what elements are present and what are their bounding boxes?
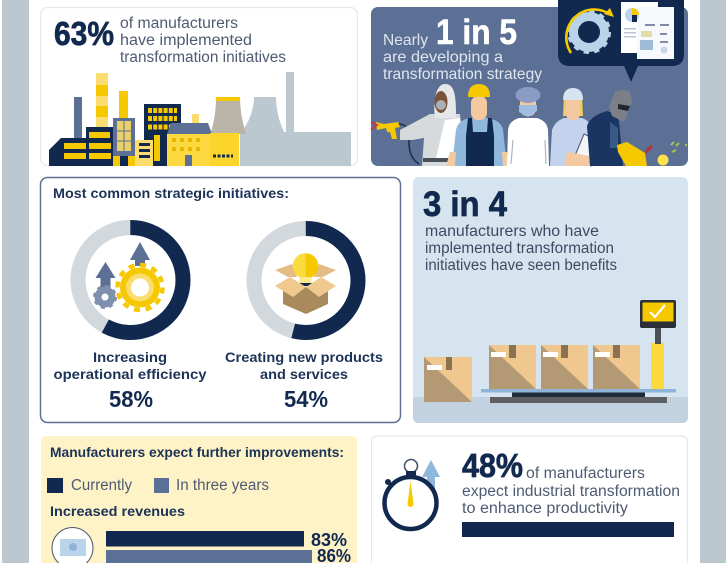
stat: 48%: 48% [462, 447, 523, 484]
stat: 3 in 4: 3 in 4 [423, 185, 508, 224]
bar chart: increased revenues: 83% [311, 530, 347, 550]
text: nearly 1 in 5 are developing a transformation strategy: transformation strategy [383, 66, 542, 83]
legend: Currently [71, 477, 132, 494]
text: of manufacturers have implemented transformation initiatives: transformation initiatives [120, 49, 286, 66]
floor [413, 397, 688, 423]
heading: manufacturers expect further improvements: Manufacturers expect further improvements: [50, 444, 344, 460]
box [541, 345, 588, 389]
illustration: five factory workers [371, 84, 686, 166]
legend [47, 477, 269, 494]
label: increasing operational efficiency 58%: operational efficiency [54, 366, 207, 382]
worker: hard hat and overalls [446, 84, 509, 166]
heading: most common strategic initiatives: Most common strategic initiatives: [53, 185, 289, 201]
donut chart: 54% new products and services [254, 228, 358, 332]
illustration: boxes on conveyor with checkmark scanner [424, 300, 676, 403]
panel: 63% of manufacturers [40, 8, 358, 166]
label: increasing operational efficiency 58%: 58% [109, 386, 153, 412]
text: of manufacturers have implemented transformation initiatives [120, 15, 286, 66]
label: increasing operational efficiency 58%: Increasing [93, 349, 167, 365]
panel: 48% enhance productivity [372, 436, 688, 563]
text: nearly 1 in 5 are developing a transformation strategy: are developing a [383, 49, 503, 66]
panel: nearly 1 in 5 [371, 0, 688, 166]
label: increasing operational efficiency 58% [54, 349, 207, 412]
box [424, 357, 472, 402]
text: manufacturers who have implemented transformation initiatives have seen benefits: manufacturers who have [425, 223, 599, 240]
icon: light bulb in open box [275, 253, 336, 314]
bar chart: increased revenues [106, 530, 351, 563]
label: creating new products and services 54% [225, 349, 383, 412]
box [489, 345, 536, 389]
panel: most common strategic initiatives [40, 178, 400, 422]
text: of manufacturers have implemented transformation initiatives: have implemented [120, 32, 252, 49]
worker: cleanroom coat and hairnet [507, 87, 549, 166]
donut chart: 58% operational efficiency [78, 228, 183, 332]
text: nearly 1 in 5 are developing a transformation strategy: Nearly [383, 32, 428, 49]
text: of manufacturers have implemented transformation initiatives: of manufacturers [120, 15, 238, 32]
label: creating new products and services 54%: 54% [284, 386, 328, 412]
box [593, 345, 640, 389]
illustration: factory skyline [49, 72, 351, 166]
text: manufacturers who have implemented transformation initiatives have seen benefits: initiatives have seen benefits [425, 257, 617, 274]
icon: stopwatch with up arrow [384, 460, 440, 529]
text: of manufacturers expect industrial transformation to enhance productivity [462, 465, 680, 517]
text: of manufacturers expect industrial transformation to enhance productivity: to enhance productivity [462, 500, 628, 517]
panel: manufacturers expect further improvements [41, 436, 357, 563]
bar: 48% [462, 522, 674, 537]
worker: welder [587, 90, 686, 166]
legend: In three years [176, 477, 269, 494]
text: of manufacturers expect industrial transformation to enhance productivity: expect industrial transformation [462, 483, 680, 500]
worker: spray painter [371, 84, 464, 166]
icon: banknote in circle [52, 528, 93, 563]
worker: blonde with clipboard [550, 88, 601, 166]
text: manufacturers who have implemented transformation initiatives have seen benefits [425, 223, 617, 274]
callout: speech bubble with gear and documents [558, 0, 684, 82]
text: nearly 1 in 5 are developing a transformation strategy [383, 13, 542, 83]
label: creating new products and services 54%: Creating new products [225, 349, 383, 365]
text: nearly 1 in 5 are developing a transformation strategy: 1 in 5 [436, 13, 517, 52]
stat: 63%: 63% [54, 15, 114, 52]
label: creating new products and services 54%: and services [260, 366, 348, 382]
text: manufacturers who have implemented transformation initiatives have seen benefits: implemented transformation [425, 240, 614, 257]
icon: gears with up arrows [94, 242, 162, 310]
subheading: increased revenues: Increased revenues [50, 503, 185, 519]
panel: 3 in 4 manufacturers [413, 177, 688, 423]
text: of manufacturers expect industrial transformation to enhance productivity: of manufacturers [526, 465, 645, 482]
